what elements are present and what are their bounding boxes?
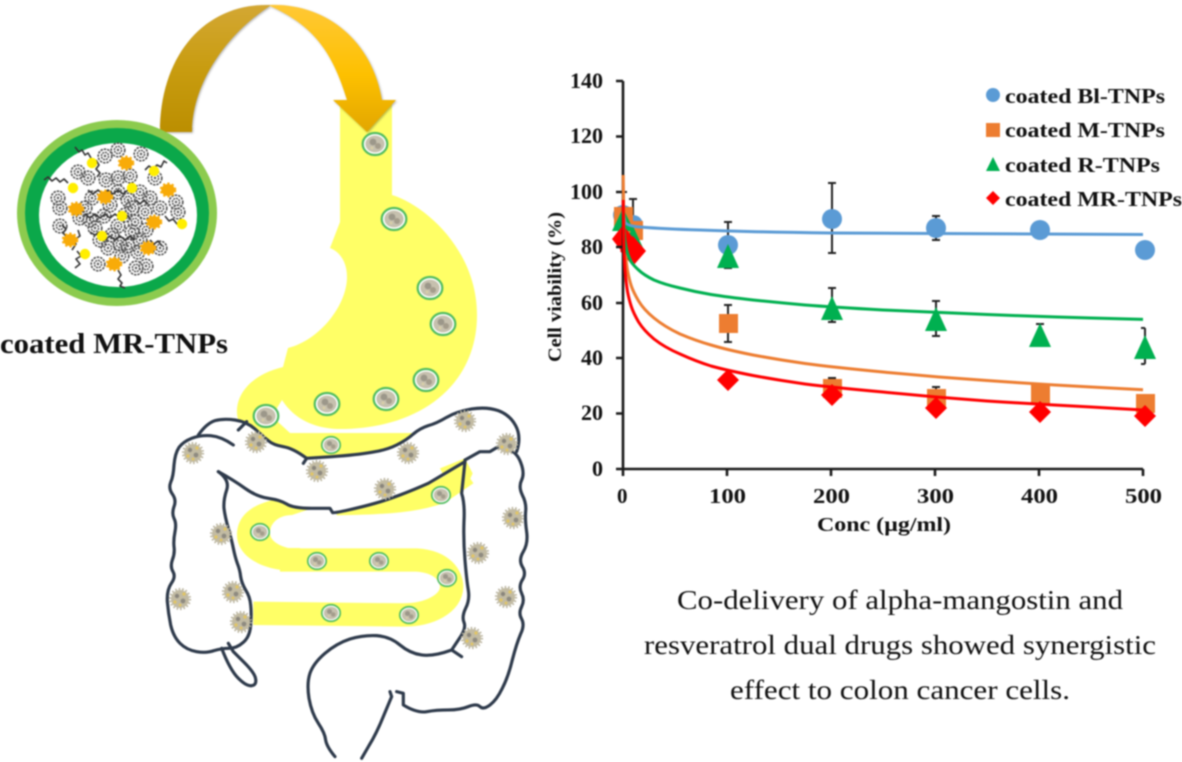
beads: coated particles in small intestine <box>251 437 456 623</box>
particles: uncoated particles in colon <box>170 411 523 648</box>
legend: coated Bl-TNPs <box>1005 84 1165 108</box>
polymer coils <box>51 143 185 275</box>
x axis tick labels: 300 <box>917 484 954 508</box>
polymer chains <box>44 147 186 288</box>
x axis tick labels: 200 <box>813 484 850 508</box>
small intestine (yellow) <box>237 473 467 615</box>
legend: coated R-TNPs <box>1005 153 1160 177</box>
y axis tick labels <box>570 68 603 481</box>
legend: coated MR-TNPs <box>1005 187 1182 211</box>
x axis tick labels: 400 <box>1021 484 1058 508</box>
y axis title: Cell viability (%) <box>545 212 566 362</box>
caption text <box>644 585 1156 705</box>
panel: coated MR-TNP nanoparticle <box>17 120 217 306</box>
axes <box>616 81 1143 476</box>
y axis tick labels: 40 <box>581 345 603 370</box>
stomach (yellow) <box>237 100 477 457</box>
y axis tick labels: 120 <box>570 123 603 148</box>
x axis tick labels: 0 <box>617 484 628 508</box>
y axis tick labels: 60 <box>581 290 603 315</box>
x axis title: Conc (µg/ml) <box>817 514 951 536</box>
legend: coated M-TNPs <box>1005 118 1165 142</box>
panel: colon outline <box>167 407 527 758</box>
y axis tick labels: 100 <box>570 179 603 204</box>
series markers: coated R-TNPs <box>612 208 1156 359</box>
chart: cell viability vs concentration <box>545 68 1162 536</box>
arrow: curved gold arrow into stomach <box>160 5 396 132</box>
caption text: effect to colon cancer cells. <box>730 675 1070 705</box>
drug: yellow resveratrol <box>68 158 187 259</box>
series markers: coated M-TNPs <box>614 207 1155 413</box>
legend <box>986 84 1182 211</box>
x axis tick labels: 100 <box>709 484 746 508</box>
series markers: coated MR-TNPs <box>612 225 1156 427</box>
drug: orange mangostin <box>63 157 175 270</box>
beads: coated particles in stomach <box>254 133 455 427</box>
y axis tick labels: 20 <box>581 400 603 425</box>
caption text: resveratrol dual drugs showed synergistic <box>644 630 1156 660</box>
x axis tick labels: 500 <box>1125 484 1162 508</box>
y axis tick labels: 0 <box>592 456 603 481</box>
y axis tick labels: 140 <box>570 68 603 93</box>
y axis tick labels: 80 <box>581 234 603 259</box>
series markers: coated Bl-TNPs <box>613 205 1155 260</box>
x axis tick labels <box>617 484 1162 508</box>
heading: coated MR-TNPs: coated MR-TNPs <box>0 329 228 360</box>
error bars <box>619 183 1145 400</box>
caption text: Co-delivery of alpha-mangostin and <box>677 585 1124 615</box>
fit curves <box>623 175 1143 410</box>
